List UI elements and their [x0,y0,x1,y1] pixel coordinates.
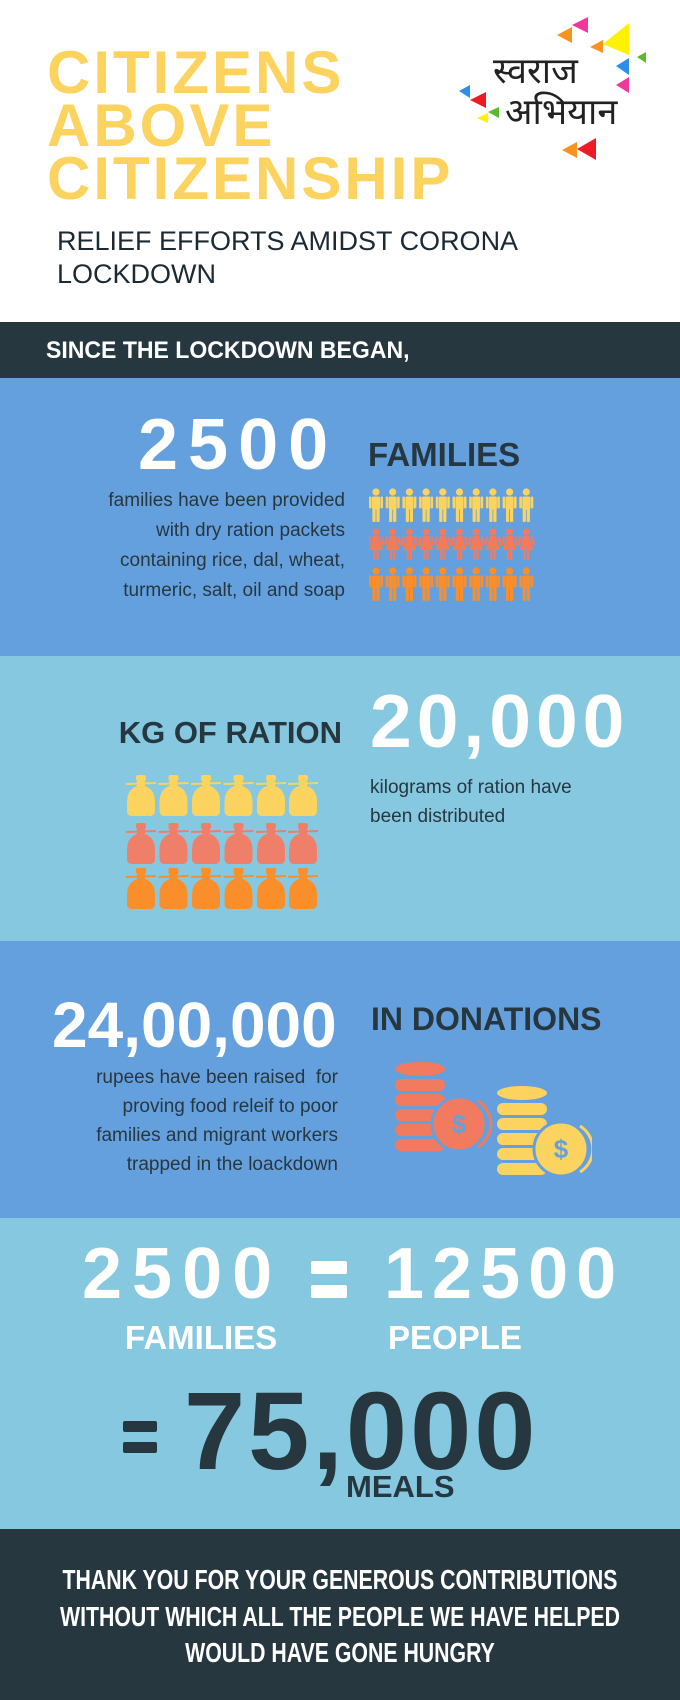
stat: 75,000 meals: MEALS [346,1469,454,1504]
footer: thank you message: WOULD HAVE GONE HUNGRY [185,1637,495,1668]
panel: donations [0,941,680,1218]
heading: families: FAMILIES [368,436,520,473]
icon: coin stacks: $ [452,1109,467,1139]
logo: swaraj abhiyan: अभियान [505,91,617,132]
text: families description: containing rice, dal, wheat, [120,550,345,571]
text: donations description: rupees have been raised for [96,1067,338,1088]
text: families description: families have been provided [108,490,345,511]
text: donations description: proving food releif to poor [123,1096,338,1117]
stat: 12500 people: PEOPLE [388,1319,522,1356]
stat: 2500 families: FAMILIES [125,1319,277,1356]
icon: coin stacks [395,1062,592,1175]
stat: 12500 people [384,1234,624,1356]
title [47,39,453,212]
stat: 12500 people: 12500 [384,1234,624,1314]
stat: 2500 families: 2500 [82,1234,282,1314]
stat: 20,000: 20,000 [370,679,629,763]
icon grid: sacks [126,775,318,909]
subtitle: LOCKDOWN [57,259,216,289]
footer: thank you message: THANK YOU FOR YOUR GENEROUS CONTRIBUTIONS [63,1564,617,1595]
text: families description: with dry ration packets [156,520,345,541]
text: families description: turmeric, salt, oil and soap [123,580,345,601]
icon: coin stacks: $ [554,1134,569,1164]
panel: families [0,378,680,656]
title: CITIZENSHIP [47,145,453,212]
text: donations description [96,1067,338,1175]
stat: 75,000 meals: 75,000 [184,1370,538,1493]
title: ABOVE [47,92,275,159]
logo: swaraj abhiyan: स्वराज [493,50,578,91]
stat: 2500 families [82,1234,282,1356]
stat: 24,00,000: 24,00,000 [52,989,337,1061]
panel: header [0,0,680,322]
icon grid: people [369,488,535,601]
subtitle: RELIEF EFFORTS AMIDST CORONA [57,226,518,256]
text: ration description [370,777,572,827]
subtitle [57,226,518,289]
heading: kg of ration: KG OF RATION [119,715,342,750]
stat: 2500: 2500 [138,405,338,485]
title: CITIZENS [47,39,344,106]
text: families description [108,490,345,601]
heading: in donations: IN DONATIONS [371,1001,602,1037]
footer: thank you message: WITHOUT WHICH ALL THE PEOPLE WE HAVE HELPED [60,1601,620,1632]
equals sign [123,1421,157,1453]
text: donations description: trapped in the loackdown [127,1154,338,1175]
equals sign [311,1261,347,1298]
panel: ration [0,656,680,941]
panel: equation [0,1218,680,1529]
text: ration description: been distributed [370,806,505,827]
banner: since the lockdown began: SINCE THE LOCKDOWN BEGAN, [46,337,410,364]
footer: thank you message [0,1529,680,1700]
logo: swaraj abhiyan [459,17,646,160]
banner: since the lockdown began [0,322,680,378]
text: donations description: families and migrant workers [96,1125,338,1146]
text: ration description: kilograms of ration have [370,777,572,798]
